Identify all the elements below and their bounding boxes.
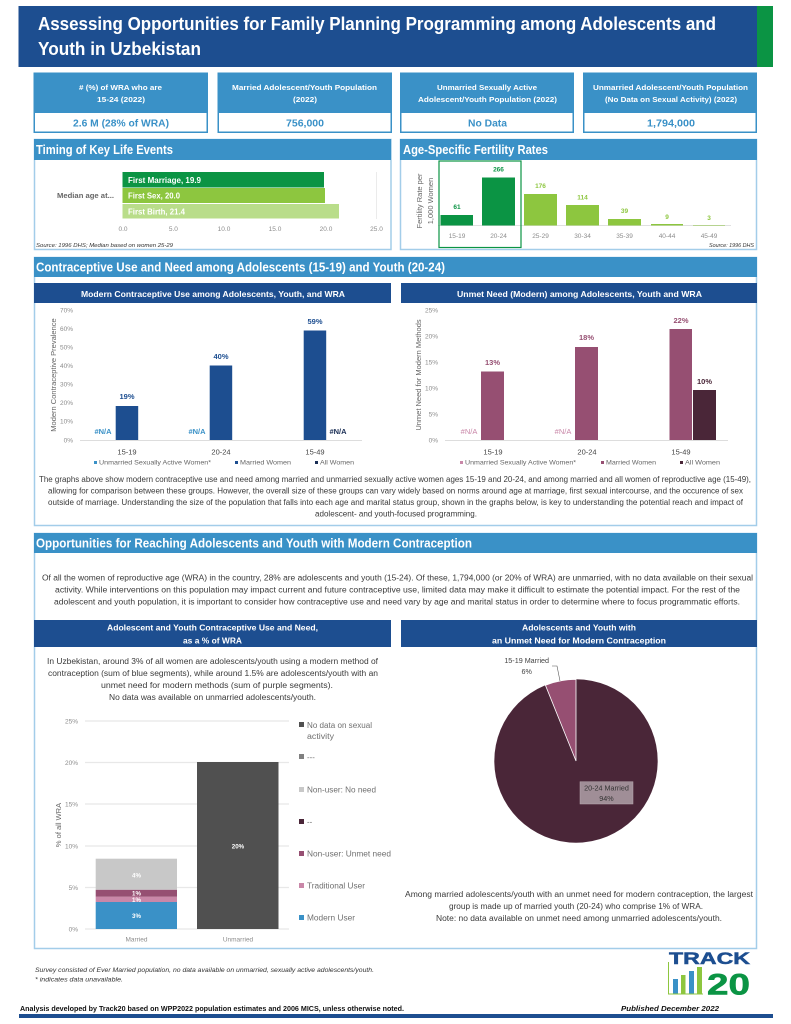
stacked bar chart: percent of all WRA: 10% (65, 844, 78, 850)
stacked bar chart: percent of all WRA: 4% (132, 872, 141, 880)
attribution line: Analysis developed by Track20 based on WPP2022 population estimates and 2006 MICS, unless otherwise noted. (20, 1004, 404, 1013)
logo: Track20: TRACK (669, 950, 750, 968)
bar chart: unmet need: #N/A (555, 427, 571, 436)
panel: opportunities for reaching adolescents and youth (34, 533, 757, 948)
panel: age-specific fertility rates (400, 139, 757, 250)
panel: contraceptive use and need (34, 257, 757, 526)
bar chart: unmet need: 20-24 (577, 448, 597, 456)
stacked bar chart: percent of all WRA: 20% (65, 760, 78, 767)
sub-heading: unmet need for modern contraception: an Unmet Need for Modern Contraception (492, 636, 666, 646)
legend (94, 460, 355, 466)
bar chart: median age at first events: First Sex, 20.0 (128, 192, 181, 200)
chart description: contraception (sum of blue segments), while around 1.5% are adolescents/youth with an (48, 669, 378, 678)
bar chart: modern contraceptive use: 15-49 (305, 448, 325, 456)
chart description: No data was available on unmarried adolescents/youth. (109, 693, 316, 702)
explanatory paragraph: The graphs above show modern contraceptive use and need among married and unmarried sexually active women ages 15-19 and 20-24, and among married and all women of reproductive age (15-49), (39, 475, 751, 484)
bar chart: fertility rates by age: 3 (707, 215, 711, 222)
bar chart: median age at first events: First Birth, 21.4 (128, 208, 186, 216)
title banner (18, 6, 773, 67)
KPI: percent of WRA aged 15-24: 2.6 M (28% of WRA) (73, 118, 169, 130)
bar chart: fertility rates by age: 61 (453, 204, 461, 211)
bar chart: fertility rates by age: Fertility Rate per (415, 173, 424, 229)
bar chart: median age at first events: Median age at... (57, 191, 114, 200)
heading: contraceptive use and need: Contraceptive Use and Need among Adolescents (15-19) and Youth (20-24) (36, 260, 445, 274)
logo: Track20 (668, 950, 750, 1002)
bar chart: unmet need: 18% (579, 333, 594, 342)
bar chart: modern contraceptive use: Modern Contraceptive Prevalence (49, 318, 58, 432)
bar chart: median age at first events: 0.0 (118, 226, 128, 233)
bar chart: modern contraceptive use: #N/A (329, 427, 347, 436)
source note: Source: 1996 DHS (709, 243, 754, 249)
bar chart: modern contraceptive use: #N/A (94, 427, 112, 436)
legend: Unmarried Sexually Active Women* (465, 460, 577, 466)
bar chart: median age at first events: 15.0 (269, 226, 282, 233)
bar chart: modern contraceptive use: 59% (307, 317, 323, 326)
title (38, 13, 716, 59)
stacked bar chart: percent of all WRA: 3% (132, 913, 141, 920)
legend: Modern User (307, 914, 355, 922)
bar chart: median age at first events (57, 172, 383, 233)
stacked bar chart: percent of all WRA: Married (125, 936, 148, 944)
legend: --- (307, 753, 315, 762)
sub-heading: use and need as percent of WRA: as a % of WRA (183, 636, 242, 646)
legend: Non-user: Unmet need (307, 850, 391, 858)
stacked bar chart: percent of all WRA: 20% (232, 844, 245, 850)
sub-heading: unmet need (401, 283, 757, 303)
legend: Married Women (240, 460, 292, 466)
bar chart: fertility rates by age: 1,000 Women (426, 178, 435, 224)
bar chart: modern contraceptive use: 19% (119, 392, 135, 401)
bar chart: unmet need (414, 308, 728, 466)
legend: All Women (320, 460, 355, 466)
bar chart: unmet need: 22% (673, 316, 689, 325)
bar chart: modern contraceptive use: 40% (213, 352, 229, 361)
chart description (47, 657, 379, 702)
stacked bar chart: percent of all WRA (54, 718, 391, 944)
KPI: married population: 756,000 (286, 118, 324, 130)
KPI: percent of WRA aged 15-24: 15-24 (2022) (97, 95, 146, 104)
pie chart description: group is made up of married youth (20-24) who comprise 1% of WRA. (449, 902, 703, 911)
bar chart: modern contraceptive use: 10% (60, 418, 73, 426)
legend: Married Women (606, 460, 657, 466)
heading: age-specific fertility rates: Age-Specific Fertility Rates (403, 143, 548, 157)
publication date: Published December 2022 (621, 1004, 719, 1013)
chart description: unmet need for modern methods (sum of purple segments). (101, 681, 333, 690)
heading: timing of key life events: Timing of Key Life Events (36, 143, 173, 157)
stacked bar chart: percent of all WRA: 1% (132, 890, 141, 898)
bar chart: modern contraceptive use: 0% (64, 438, 73, 444)
explanatory paragraph: adolescent- and youth-focused programming. (315, 510, 477, 518)
footnotes (35, 967, 374, 984)
KPI: unmarried population with no data (583, 72, 757, 133)
bar chart: unmet need: 25% (425, 308, 438, 314)
bar chart: modern contraceptive use: 60% (60, 326, 73, 333)
pie chart: unmet need by group: 15-19 Married (504, 656, 549, 665)
bar chart: unmet need: 20% (425, 334, 438, 340)
KPI: married population: Married Adolescent/Youth Population (232, 83, 377, 92)
bar chart: fertility rates by age: 45-49 (701, 233, 718, 240)
bar chart: fertility rates by age: 15-19 (449, 233, 466, 240)
stacked bar chart: percent of all WRA: 25% (65, 718, 78, 726)
footer bar (19, 1014, 773, 1018)
KPI: married population (218, 72, 392, 133)
KPI: unmarried sexually active population: Adolescent/Youth Population (2022) (418, 95, 558, 104)
bar chart: unmet need: 15-49 (671, 448, 691, 456)
pie chart: unmet need by group: 6% (522, 667, 533, 676)
legend: All Women (685, 460, 721, 466)
bar chart: modern contraceptive use: 70% (60, 308, 73, 314)
bar chart: median age at first events: 5.0 (169, 226, 178, 233)
explanatory paragraph: allowing for comparison between these groups. However, the overall size of these groups can vary widely based on norms around age at marriage, first sexual intercourse, and the occurence of sex (48, 486, 743, 496)
stacked bar chart: percent of all WRA: % of all WRA (54, 803, 63, 847)
bar chart: fertility rates by age: 30-34 (574, 233, 591, 240)
title: Assessing Opportunities for Family Planning Programming among Adolescents and (38, 13, 716, 34)
bar chart: fertility rates by age: 9 (665, 214, 669, 221)
stacked bar chart: percent of all WRA: Unmarried (223, 936, 254, 944)
bar chart: modern contraceptive use: #N/A (188, 427, 206, 436)
legend: Non-user: No need (307, 786, 376, 794)
KPI: unmarried sexually active population: No Data (468, 118, 507, 130)
KPI: percent of WRA aged 15-24: # (%) of WRA who are (79, 83, 162, 92)
pie chart description: Note: no data available on unmet need among unmarried adolescents/youth. (436, 914, 722, 923)
pie chart: unmet need by group: 20-24 Married (584, 784, 629, 792)
footnotes: * indicates data unavailable. (35, 976, 123, 984)
highlight box: ages 15-24 (439, 161, 521, 248)
bar chart: median age at first events: First Marriage, 19.9 (128, 176, 202, 185)
explanatory paragraph: outside of marriage. Understanding the size of the population that falls into each age and marital status group, shown in the graphs below, is key to understanding the potential reach and impact of (48, 498, 744, 507)
legend: activity (307, 732, 334, 741)
KPI: unmarried population with no data: 1,794,000 (647, 118, 695, 130)
heading: opportunities: Opportunities for Reaching Adolescents and Youth with Modern Contraception (36, 536, 472, 550)
sub-heading: use and need as percent of WRA: Adolescent and Youth Contraceptive Use and Need, (107, 622, 318, 632)
KPI: unmarried sexually active population: Unmarried Sexually Active (437, 83, 537, 92)
KPI: married population: (2022) (293, 95, 318, 104)
legend (299, 721, 391, 922)
bar chart: modern contraceptive use: 20% (60, 400, 73, 407)
stacked bar chart: percent of all WRA: 1% (132, 897, 141, 904)
bar chart: unmet need: Unmet Need for Modern Methods (414, 319, 423, 431)
KPI: unmarried sexually active population (400, 72, 574, 133)
stacked bar chart: percent of all WRA: 0% (69, 926, 78, 934)
bar chart: fertility rates by age: 25-29 (532, 233, 549, 240)
pie chart description (405, 890, 754, 923)
bar chart: unmet need: 15-19 (483, 448, 503, 456)
bar chart: fertility rates by age: 266 (493, 166, 504, 174)
legend: Unmarried Sexually Active Women* (99, 460, 212, 466)
explanatory paragraph (39, 475, 751, 518)
bar chart: unmet need: 15% (425, 360, 438, 366)
bar chart: median age at first events: 10.0 (218, 226, 231, 233)
KPI: unmarried population with no data: (No Data on Sexual Activity) (2022) (605, 95, 737, 104)
intro paragraph: adolescent and youth population, it is important to consider how contraceptive use and need vary by age and marital status in order to determine where to focus programmatic efforts. (54, 598, 740, 606)
bar chart: unmet need: 13% (485, 358, 500, 367)
legend: No data on sexual (307, 721, 372, 730)
title: Youth in Uzbekistan (38, 38, 201, 59)
legend (460, 460, 721, 466)
bar chart: unmet need: 10% (425, 386, 438, 392)
bar chart: median age at first events: 25.0 (370, 226, 383, 233)
KPI: unmarried population with no data: Unmarried Adolescent/Youth Population (593, 83, 748, 92)
intro paragraph: Of all the women of reproductive age (WRA) in the country, 28% are adolescents and youth (15-24). Of these, 1,794,000 (or 20% of WRA) are unmarried, with no data available on their sexual (42, 574, 753, 582)
sub-heading: unmet need for modern contraception (401, 620, 757, 647)
intro paragraph (42, 574, 753, 606)
pie chart description: Among married adolescents/youth with an unmet need for modern contraception, the largest (405, 890, 754, 899)
stacked bar chart: percent of all WRA: 15% (65, 802, 78, 808)
bar chart: fertility rates by age: 114 (577, 194, 588, 202)
bar chart: modern contraceptive use: 50% (60, 344, 73, 352)
bar chart: fertility rates by age: 39 (621, 208, 628, 215)
bar chart: modern contraceptive use: 30% (60, 382, 73, 388)
bar chart: fertility rates by age: 176 (535, 183, 546, 190)
legend: -- (307, 818, 313, 826)
bar chart: modern contraceptive use (49, 308, 362, 466)
bar chart: unmet need: #N/A (461, 427, 477, 436)
bar chart: modern contraceptive use: 15-19 (117, 448, 137, 456)
source note: Source: 1996 DHS; Median based on women 25-29 (36, 243, 173, 249)
bar chart: unmet need: 0% (429, 438, 438, 444)
sub-heading: unmet need: Unmet Need (Modern) among Adolescents, Youth and WRA (457, 289, 702, 299)
bar chart: modern contraceptive use: 20-24 (211, 448, 231, 456)
sub-heading: unmet need for modern contraception: Adolescents and Youth with (522, 622, 636, 632)
sub-heading: modern contraceptive use: Modern Contraceptive Use among Adolescents, Youth, and WRA (81, 289, 345, 299)
bar chart: unmet need: 10% (697, 377, 712, 386)
sub-heading: modern contraceptive use (34, 283, 391, 303)
bar chart: fertility rates by age: 20-24 (490, 233, 507, 240)
footnotes: Survey consisted of Ever Married population, no data available on unmarried, sexually active adolescents/youth. (35, 967, 374, 974)
bar chart: fertility rates by age: 35-39 (616, 233, 633, 240)
KPI: percent of WRA aged 15-24 (34, 72, 208, 133)
pie chart: unmet need by group: 94% (599, 794, 614, 803)
legend: Traditional User (307, 882, 365, 890)
intro paragraph: activity. While interventions on this population may impact current and future contraceptive use, limited data may make it difficult to estimate the potential impact. For the rest of the (55, 586, 741, 594)
bar chart: unmet need: 5% (429, 412, 438, 418)
bar chart: median age at first events: 20.0 (320, 226, 333, 233)
stacked bar chart: percent of all WRA: 5% (69, 885, 78, 892)
pie chart: unmet need by group (494, 656, 658, 843)
chart description: In Uzbekistan, around 3% of all women are adolescents/youth using a modern method of (47, 657, 379, 666)
bar chart: modern contraceptive use: 40% (60, 363, 73, 370)
bar chart: fertility rates by age: 40-44 (659, 233, 676, 240)
sub-heading: use and need as percent of WRA (34, 620, 391, 647)
panel: timing of key life events (34, 139, 391, 250)
bar chart: fertility rates by age (415, 166, 731, 240)
logo: Track20: 20 (707, 968, 750, 1002)
